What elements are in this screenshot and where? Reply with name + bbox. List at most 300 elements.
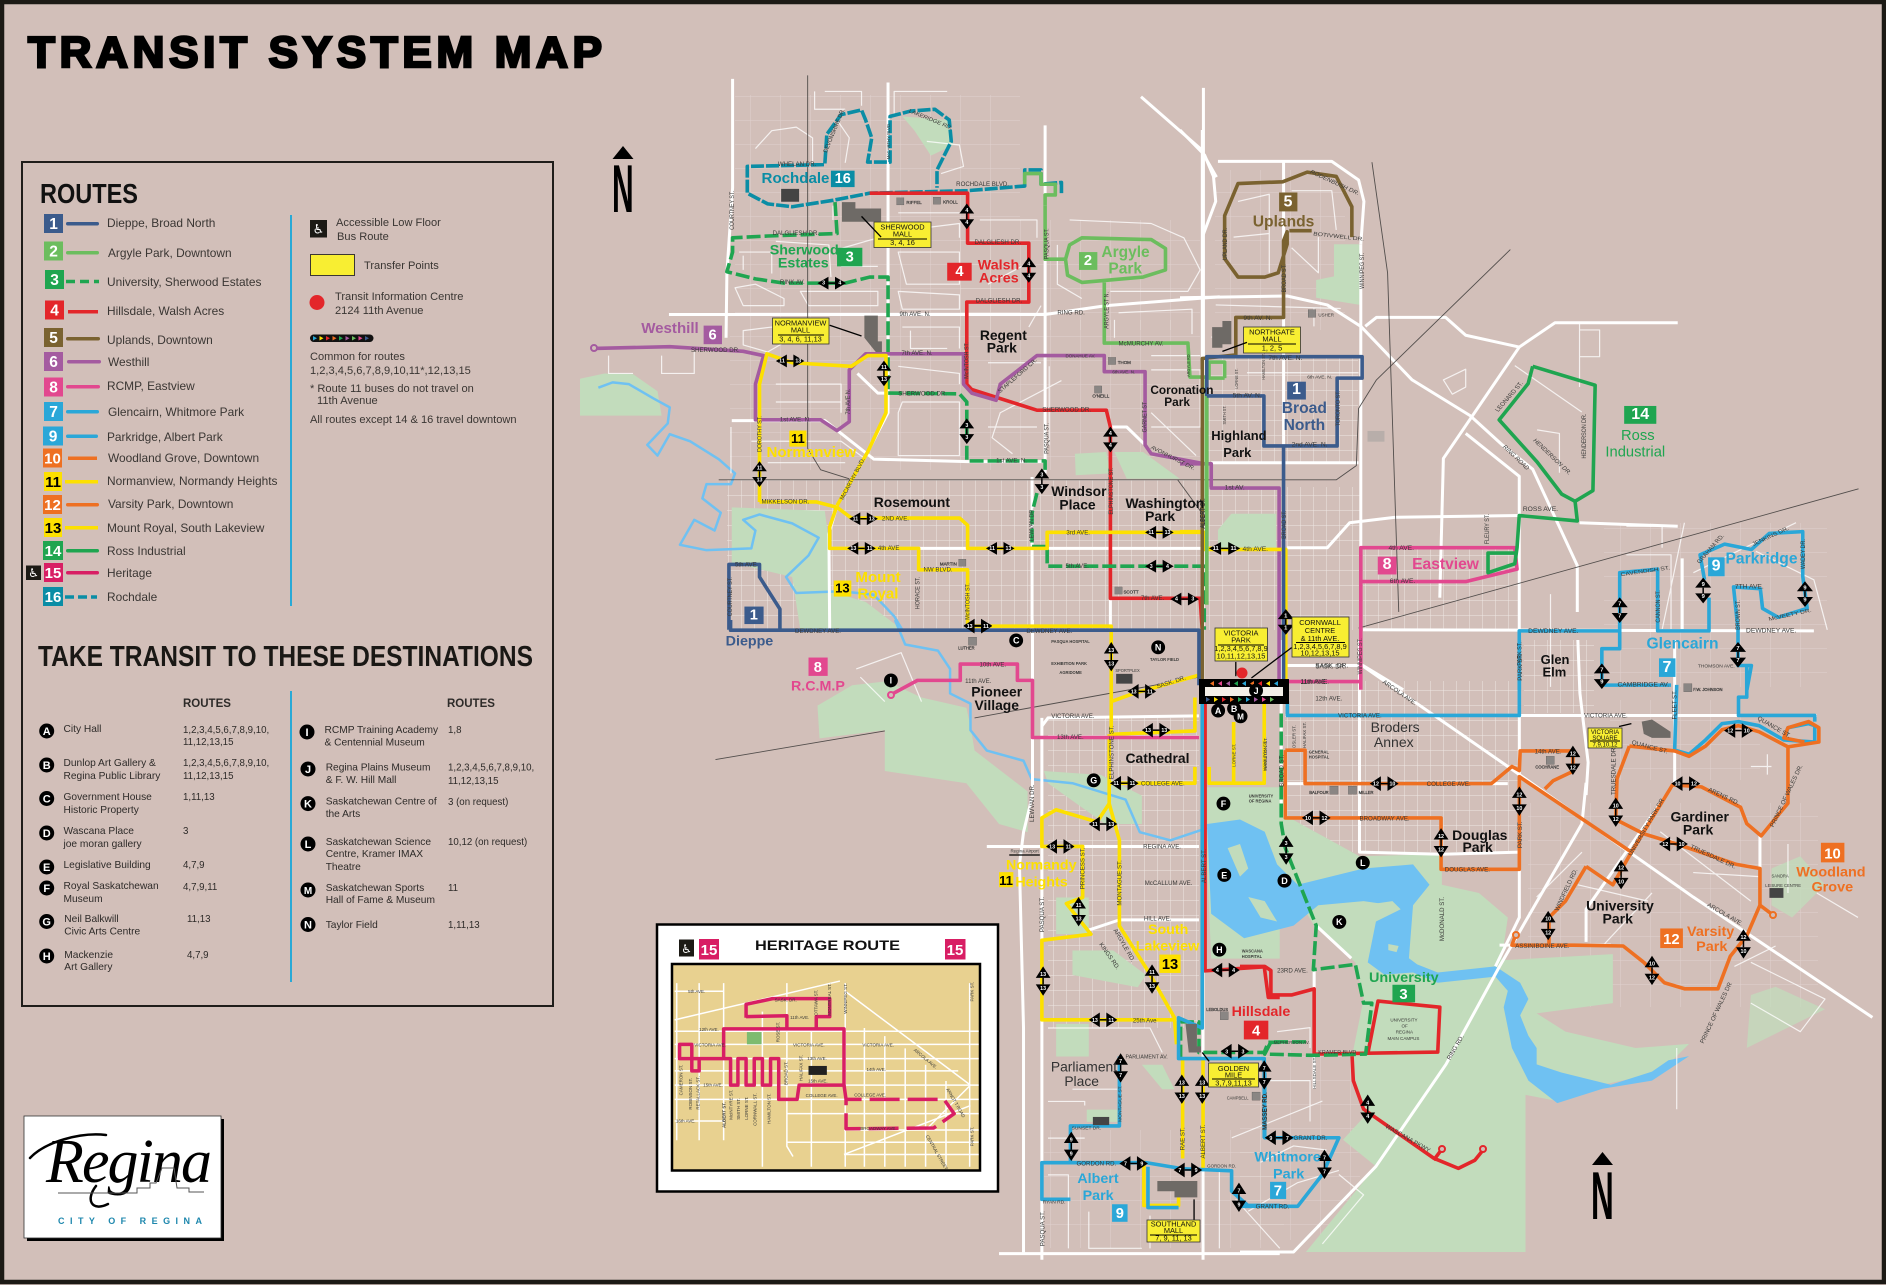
direction arrows: 11 [1130,781,1135,787]
route legend: 7 [49,404,58,421]
coloured route area labels: North [1284,417,1325,434]
route 16 Rochdale [747,109,1061,207]
route legend: 14 [45,543,62,560]
street labels: QUANCE ST. [1756,715,1792,740]
coloured route area labels: Rochdale [762,170,829,187]
neighbourhood labels black: Highland [1211,428,1267,443]
route terminals orange and red [1439,912,1776,1152]
schools: O'NEILL [1092,394,1110,399]
street labels: RINK AV. [780,279,805,286]
street labels: DOROTHY ST. [757,416,764,452]
street labels: McDONALD ST. [1439,897,1446,941]
transfer point boxes: 3,7,9,11,13 [1215,1078,1252,1088]
inset map: 16th AVE. [676,1119,695,1124]
street labels: RING RD. [1057,309,1085,316]
route number squares: 3 [1399,987,1408,1003]
route legend: Argyle Park, Downtown [108,246,232,260]
street labels: MASSEY RD. [1262,1092,1269,1130]
route legend: 6 [49,354,58,371]
street labels: TORONTO ST. [1335,390,1342,426]
direction arrows: 13 [967,624,973,630]
street labels: PARK ST. [1517,821,1524,848]
street labels: HALIFAX ST. [1302,722,1307,748]
direction arrows: 11 [881,365,887,371]
coloured route area labels: Ross [1621,428,1655,444]
street labels: REGINA AVE. [1143,843,1181,850]
direction arrows: 4 [1027,261,1030,267]
inset map: VICTORIA AVE. [694,1042,726,1047]
creek [598,382,1207,840]
direction arrows: 12 [1545,931,1551,937]
street labels: SHERWOOD DR. [1042,407,1091,414]
route legend: Hillsdale, Walsh Acres [107,304,224,318]
route legend: 16 [45,589,61,606]
direction arrows: 9 [1140,1161,1143,1167]
inset map: 5th AVE. [688,989,705,994]
direction arrows: 3 [1150,564,1153,570]
route number squares: 11 [999,873,1013,888]
street labels: 11th AVE. [965,678,992,685]
destination list: C [43,794,51,806]
inset map: WINNIPEG ST. [843,983,848,1014]
route legend: 11 [45,474,61,491]
direction arrows: 12 [1516,792,1522,798]
route 8 terminal [888,692,894,698]
route number squares: 5 [1284,192,1293,210]
legend notes: Accessible Low Floor [336,217,441,229]
street labels: McVEETY DR. [1768,608,1813,623]
route legend: Mount Royal, South Lakeview [107,521,265,535]
buildings [781,189,1783,1197]
divider bottom [290,691,292,982]
inset header: ♿ [681,942,692,956]
transfer point boxes: SHERWOOD [880,222,925,232]
street labels: PASQUA ST. [1044,228,1051,259]
destination list: 1,11,13 [183,792,215,803]
street labels: MONTAGUE ST. [1116,860,1123,906]
street labels: MONTAGUE ST. [1117,1086,1123,1122]
street labels: SASK. DR. [1156,674,1187,690]
street labels: PASQUA HOSPITAL [1051,639,1090,644]
route legend: 10 [44,450,61,468]
street labels: 9th AVE. N. [899,311,931,318]
destination list: Centre, Kramer IMAX [326,849,423,860]
transfer point boxes: MALL [1262,334,1282,344]
inset map: HALIFAX ST. [798,1055,803,1081]
direction arrows: 7 [1263,1066,1266,1072]
coloured route area labels: Mount [855,569,901,586]
street labels: SMITH ST. [1222,406,1227,425]
routes 7 and 9 [1042,532,1815,1208]
destination list: Legislative Building [64,860,151,871]
route legend: University, Sherwood Estates [107,275,261,289]
neighbourhood labels black: Pioneer [971,684,1023,700]
street labels: RAE ST. [1179,1127,1186,1150]
street labels: COURTNEY ST. [730,190,736,230]
inset map: SASK. DR. [775,997,797,1002]
transfer point boxes: CORNWALL [1299,618,1341,627]
street labels: DONAHUE AV. [1066,354,1095,359]
route 3 University Sherwood Estates [727,202,1372,1059]
transfer point boxes: MILE [1225,1070,1242,1080]
route 2 Argyle Park [1025,174,1225,605]
street labels: 12th AVE. [1315,695,1343,702]
direction arrows: 10 [1618,880,1624,886]
inset map: COLLEGE AVE. [806,1093,838,1098]
destination list: B [43,760,51,772]
street labels: PASQUA ST. [1040,1211,1047,1246]
street labels: PARK ST. [1517,654,1524,681]
route legend: 13 [45,520,61,537]
legend notes: Transit Information Centre [335,291,463,303]
direction arrows: 13 [1131,689,1137,695]
heading: routes: ROUTES [40,178,138,209]
route legend: 3 [50,272,59,289]
street labels: COURTNEY ST. [728,577,734,616]
street labels: GENERAL [1309,749,1329,754]
street labels: ARCOLA AVE. [1381,679,1418,707]
street labels: GARNET ST [1142,401,1148,432]
direction arrows: 4 [1232,968,1235,974]
direction arrows: 9 [1070,1151,1073,1157]
street labels: ARGYLE RD [1186,354,1191,377]
route number squares: 14 [1631,405,1649,423]
street labels: BROAD ST. [1282,510,1288,539]
direction arrows: 4 [1366,1114,1369,1120]
street labels: 4th AVE [878,545,899,552]
street labels: PRINCE OF WALES DR [1699,981,1734,1045]
destination list: 1,2,3,4,5,6,7,8,9,10, [448,762,534,774]
street labels: LORNE ST. [1234,369,1239,389]
street labels: 1st AV. [1225,484,1245,491]
destination bullets on map: F [1221,799,1227,809]
destination list: A [43,726,51,738]
street labels: 2nd AVE. N. [1292,442,1328,449]
street labels: JENKINS DR. [1751,526,1791,547]
street labels: CANNON ST. [1655,590,1662,623]
street labels: 4th AVE. [1388,545,1414,552]
destination list: I [305,727,309,739]
destination list: H [43,951,51,963]
destination bullets on map: C [1013,636,1020,646]
street labels: EXHIBITION PARK [1051,661,1087,666]
street labels [691,108,1813,1246]
street labels: 2ND AVE. [882,515,909,522]
coloured route area labels: Woodland [1796,865,1866,881]
destination list: 11,12,13,15 [183,771,233,782]
street labels: McINTOSH ST. [965,583,972,620]
direction arrows: 7 [1124,1161,1127,1167]
destination list: E [43,862,50,874]
route 6 Westhill [594,347,1279,690]
street labels: OF [1402,1024,1408,1029]
direction arrows: 10 [1545,917,1551,923]
neighbourhood labels black: Windsor [1051,483,1107,499]
street labels: DEWDNEY AVE. [1746,627,1796,634]
neighbourhood labels black: Glen [1541,652,1570,667]
destination list: Regina Plains Museum [326,762,430,774]
direction arrows: 11 [1230,546,1237,552]
street labels: PARLIAMENT AV. [1126,1055,1168,1061]
direction arrows: 13 [1149,984,1155,990]
route 4 Hillsdale Walsh Acres [870,193,1483,1168]
schools [897,197,1722,1100]
neighbourhood labels black: Park [1462,839,1493,855]
coloured route area labels: Broad [1282,400,1327,417]
route number squares: 13 [1162,957,1178,973]
destination list: 3 [183,826,188,837]
direction arrows: 7 [1286,1136,1289,1142]
route legend: Heritage [107,566,152,580]
direction arrows: 3 [1191,597,1194,603]
direction arrows [752,204,1813,1212]
route number squares: 7 [1274,1184,1282,1200]
transfer point boxes: & 11th AVE. [1301,634,1339,643]
coloured route area labels: Normanview [766,444,856,461]
direction arrows: 10 [1516,806,1522,812]
transfer point boxes: MALL [1164,1226,1183,1235]
street labels: KINGS RD. [1097,941,1121,971]
transfer point boxes: 10,11,12,13,15 [1217,652,1265,660]
transfer point boxes: CENTRE [1305,626,1335,635]
legend notes: 1,2,3,4,5,6,7,8,9,10,11*,12,13,15 [310,365,471,377]
destination list: 11,13 [187,914,211,925]
neighbourhood labels black: Park [1164,395,1190,409]
destination list: City Hall [64,724,101,735]
street labels: HILLSDALE ST. [1312,1057,1317,1089]
street labels: HAMILTON ST. [1262,741,1267,771]
neighbourhood labels black: Place [1064,1073,1099,1089]
direction arrows: 9 [1803,585,1807,591]
street labels: VICTORIA AVE. [1051,713,1095,720]
street labels: DALGLIESH DR. [773,230,819,237]
direction arrows: 13 [1040,986,1046,992]
inset map: 12th AVE. [699,1027,719,1032]
transfer point boxes: MALL [791,326,810,334]
street labels: McMURCHY AV. [1119,340,1164,347]
direction arrows: 4 [838,281,841,287]
schools: SCOTT [1123,590,1139,595]
street labels: SASK. DR. [1315,664,1346,671]
street labels: CAMPBELL [1227,1095,1249,1100]
street labels: AGRIDOME [1059,670,1082,675]
destination list: Saskatchewan Centre of [326,796,437,808]
coloured route area labels: Heights [1015,874,1068,890]
direction arrows: 4 [1027,274,1030,280]
street labels: WASCANA PKWY [1384,1123,1431,1154]
street labels: GORDON RD. [1077,1160,1117,1167]
title: TRANSIT SYSTEM MAP [28,28,602,77]
street labels: 13th AVE. [1057,734,1084,741]
destination list: K [304,799,312,811]
roads [669,79,1872,1260]
destination list: F [43,883,50,895]
inset map: 14th AVE. [866,1067,886,1072]
street labels: BROAD ST. [1278,754,1285,787]
street labels: NW BLVD. [924,566,953,573]
transfer point boxes: 7,9,10,12 [1592,742,1618,748]
legend notes: 11th Avenue [317,395,378,407]
destination list: N [304,920,312,932]
inset map: ARNOT T.ROAD [945,1087,966,1119]
street labels: PARK ST. [1517,642,1524,666]
destination list: 4,7,9,11 [183,882,217,893]
direction arrows: 13 [1049,844,1055,850]
direction arrows: 9 [1702,582,1706,588]
street labels: HOSPITAL [1242,954,1263,959]
direction arrows: 9 [1237,1202,1240,1208]
street labels: BOTIVWELL DR. [1313,232,1365,243]
route legend: RCMP, Eastview [107,379,195,393]
transfer point boxes: MALL [893,230,912,238]
street labels: LEONARD ST. [1495,381,1525,413]
legend notes: ♿ [313,222,324,238]
coloured route area labels: Normandy [1006,858,1077,874]
direction arrows: 13 [1040,972,1046,978]
street labels: WADEY DR. [1801,539,1807,569]
inset map: OTTAWA ST. [813,990,818,1016]
schools: BALFOUR [1309,790,1329,795]
coloured route area labels: Albert [1077,1171,1119,1187]
destination list: Wascana Place [64,826,134,837]
transfer point boxes: NORMANVIEW [775,318,826,328]
direction arrows: 13 [1076,917,1082,923]
destination bullets on map: I [890,676,892,686]
direction arrows: 13 [850,546,856,552]
route legend: 5 [49,330,58,347]
coloured route area labels: Walsh [978,257,1019,273]
coloured route area labels: Lakeview [1136,938,1200,954]
destination list: G [42,916,51,928]
direction arrows: 3 [965,423,968,429]
route legend: 4 [50,302,59,320]
direction arrows: 13 [1179,1094,1185,1100]
direction arrows: 3 [1285,855,1288,861]
street labels: MASSEY RD. [1261,1092,1268,1130]
inset map: BROAD ST. [784,1062,789,1085]
street labels: DALGLIESH DR. [975,239,1021,246]
street labels: THOMSON AVE. [1698,664,1735,670]
street labels: WINNIPEG ST. [1358,638,1364,674]
street labels: HOSPITAL [1309,754,1330,759]
route number squares: 4 [1252,1023,1261,1039]
street labels: PRINCESS ST. [1079,847,1086,889]
coloured route area labels: Whitmore [1254,1149,1321,1165]
coloured route area labels: Park [1083,1188,1114,1204]
route legend: 9 [49,428,58,446]
destination bullets on map: E [1221,870,1227,880]
street labels: DEWDNEY AVE. [1528,628,1579,635]
inset map: VICTORIA AVE. [862,1042,894,1047]
coloured route area labels: Argyle [1101,244,1150,261]
destination list: Theatre [326,862,361,873]
transfer point boxes: NORTHGATE [1249,328,1295,336]
street labels: 11th AVE. [1301,679,1329,686]
destination list: 4,7,9 [183,860,205,871]
route legend: 12 [44,497,61,514]
direction arrows: 11 [983,624,989,630]
street labels: ELPHINSTONE ST. [1108,725,1115,779]
destination list: 1,11,13 [448,920,480,931]
street labels: 9th AV. N. [1243,315,1273,322]
coloured route area labels: Dieppe [726,634,773,650]
inset map: ROSE ST. [776,1022,781,1042]
street labels: GRANT DR. [1294,1135,1328,1142]
transfer point boxes: 3, 4, 6, 11,13 [779,334,822,344]
neighbourhood labels black: Place [1059,496,1096,512]
street labels: WINDFIELD RD. [1554,867,1580,912]
street labels: RYAN RD. [1043,1199,1066,1205]
inset map: HAMILTON ST. [767,1094,772,1124]
street labels: HILL AVE. [1144,916,1172,923]
route legend: 2 [49,244,58,260]
street labels: RING ROAD [1501,445,1530,472]
street labels: 23RD AVE. [1277,968,1308,975]
coloured route area labels: Park [1696,939,1727,955]
transfer point boxes: GOLDEN [1218,1064,1249,1073]
street labels: GRAHAM RD. [1696,534,1727,565]
direction arrows: 9 [1269,1136,1272,1142]
street labels: SHERWOOD DR. [898,390,947,397]
destination list: & Centennial Museum [324,738,425,748]
street labels: ALBERT ST. [1201,499,1207,529]
street labels: 7TH AVE. [1735,583,1764,590]
destination list: ROUTES [183,698,231,710]
direction arrows: 7 [1119,1073,1122,1079]
route 1 Dieppe Broad North [729,357,1362,690]
direction arrows: 11 [779,358,785,364]
direction arrows: 11 [1149,970,1155,976]
neighbourhood labels black: Regent [980,327,1027,343]
direction arrows: 4 [1109,431,1112,437]
inset header [679,937,966,960]
direction arrows: 4 [965,208,968,214]
street labels: 7th AVE N. [846,388,852,415]
neighbourhood labels black: Elm [1542,664,1566,679]
street labels: DEWDNEY AVE. [1026,628,1073,635]
inset header: 15 [701,942,717,959]
street labels: SANDRA [1771,873,1789,878]
route number squares: 4 [955,264,964,280]
street labels: McCALLUM AVE. [1145,880,1193,887]
coloured route area labels: Park [1273,1167,1304,1183]
route legend: Uplands, Downtown [107,333,213,347]
street labels: SHERWOOD DR. [691,347,740,354]
direction arrows: 3 [1242,1049,1245,1055]
route number squares: 11 [791,431,805,446]
direction arrows: 12 [1321,816,1327,822]
street labels: WINNIPEG ST. [1359,252,1366,289]
street labels: WHELAN DR. [778,161,817,168]
destination list: Neil Balkwill [64,914,119,925]
street labels: 14th AVE. [1535,748,1562,755]
destination list: Museum [64,894,103,905]
direction arrows: 11 [757,466,762,472]
street labels: UNIVERSITY [1249,793,1273,798]
street labels: HORACE ST. [915,577,922,609]
destination list: Taylor Field [326,920,378,931]
street labels: COLLEGE AVE. [1141,781,1185,788]
destination bullets on map [884,633,1370,957]
inset map: ALBERT ST. [722,1102,727,1128]
street labels: 3rd AVE. [1066,530,1090,537]
direction arrows: 1 [1284,625,1288,631]
direction arrows: 12 [1662,842,1668,848]
street labels: ARGYLE RD. [1112,928,1136,963]
street labels: TRUESDALE DR. [1689,844,1737,871]
map [580,75,1872,1260]
direction arrows: 12 [1618,866,1624,872]
